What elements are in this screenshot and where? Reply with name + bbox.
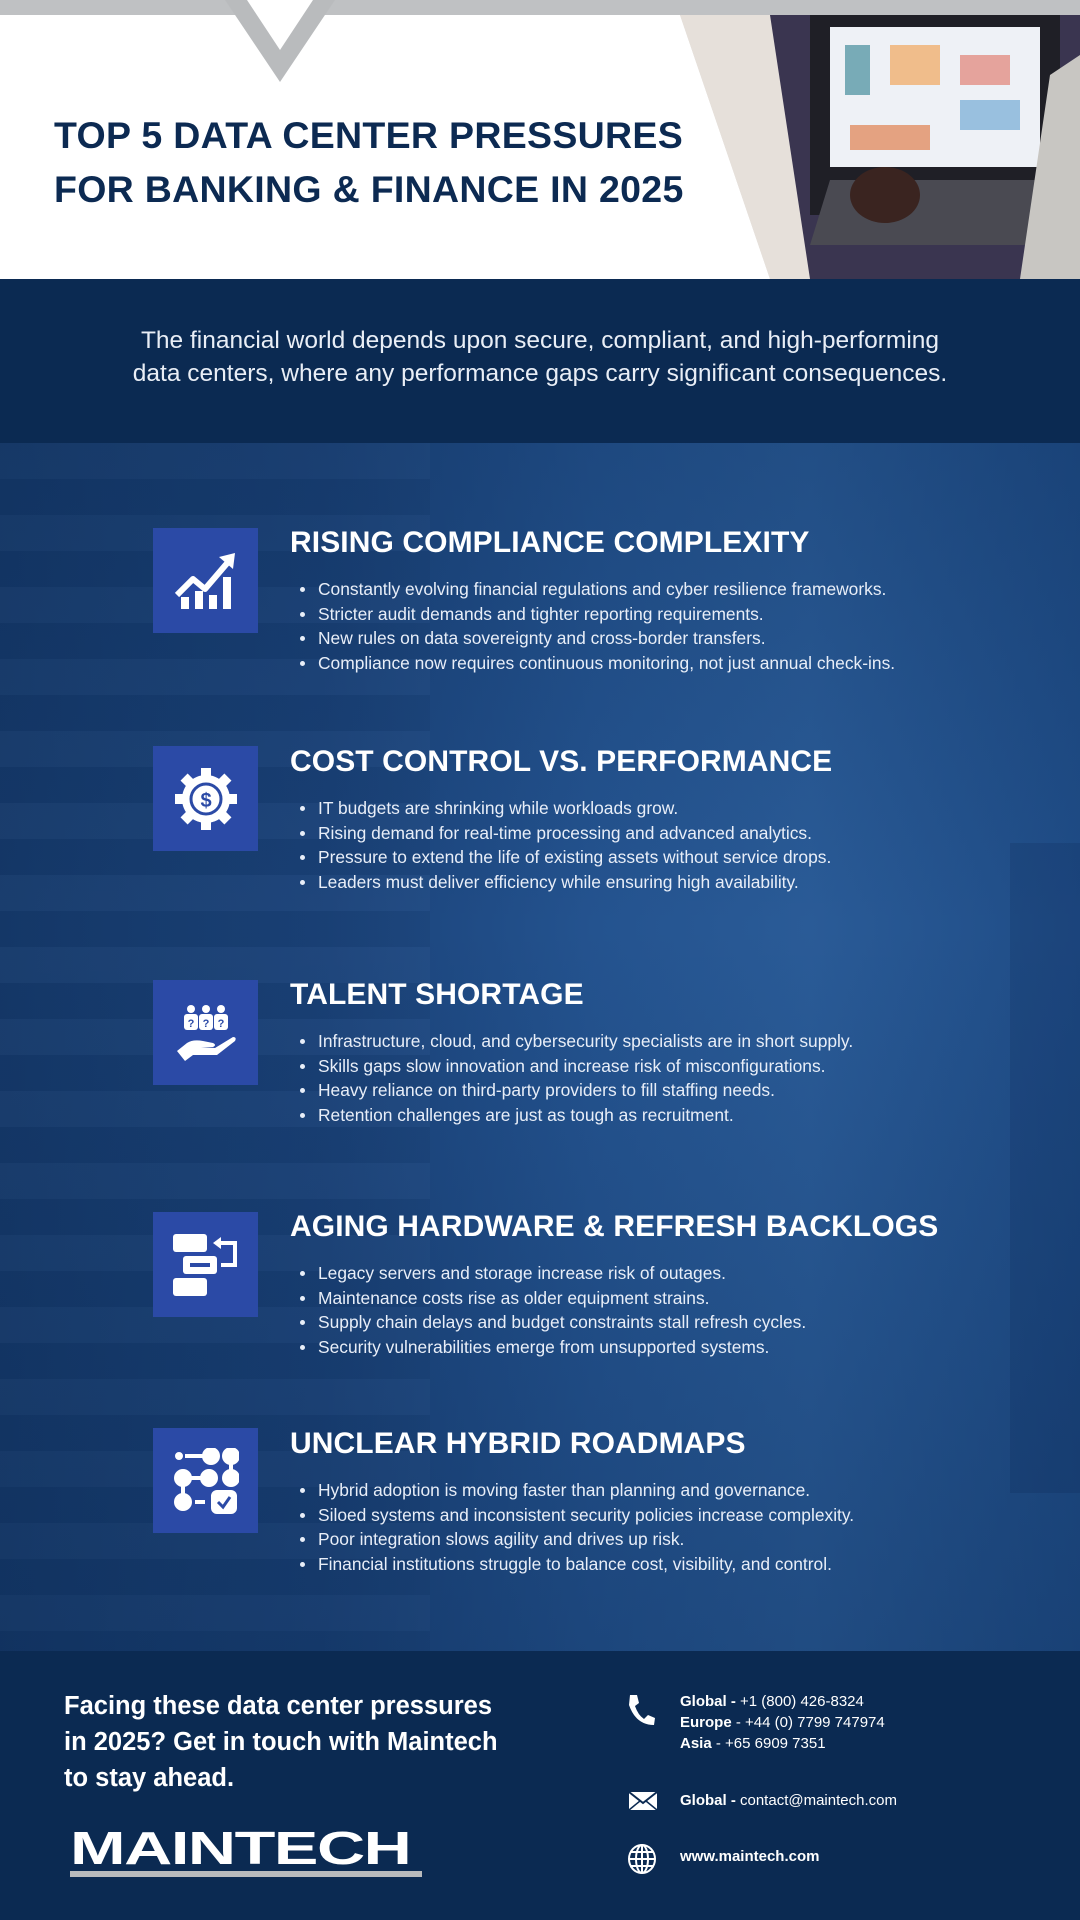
heading 3: TALENT SHORTAGE [290,978,584,1011]
bullets 2: Pressure to extend the life of existing assets without service drops. [318,847,831,867]
bullets 3: Heavy reliance on third-party providers to fill staffing needs. [318,1080,775,1100]
phone numbers: Global - +1 (800) 426-8324 [680,1693,864,1710]
bullets 2: Leaders must deliver efficiency while ensuring high availability. [318,872,799,892]
bullets 5: Financial institutions struggle to balance cost, visibility, and control. [318,1554,832,1574]
section 2 icon: gear dollar: $ [200,790,211,812]
title [54,114,684,210]
phone numbers: Asia - +65 6909 7351 [680,1735,826,1752]
icon: globe [628,1844,656,1874]
bullets 3: Infrastructure, cloud, and cybersecurity specialists are in short supply. [318,1031,853,1051]
section 3 icon: talent hand: ? [217,1018,224,1030]
heading 4: AGING HARDWARE & REFRESH BACKLOGS [290,1210,938,1243]
section 4 icon: refresh blocks [153,1212,258,1317]
intro text: The financial world depends upon secure, compliant, and high-performing [141,327,939,354]
section 3 icon: talent hand [153,980,258,1085]
main panel: pressures [0,443,1080,1651]
heading 2: COST CONTROL VS. PERFORMANCE [290,745,832,778]
intro text [133,327,947,387]
bullets 1: New rules on data sovereignty and cross-border transfers. [318,628,766,648]
section 3 icon: talent hand: ? [187,1018,194,1030]
bullets 1: Constantly evolving financial regulations and cyber resilience frameworks. [318,579,886,599]
phone numbers [680,1693,885,1752]
bullets 4: Security vulnerabilities emerge from unsupported systems. [318,1336,769,1356]
bullets 4: Maintenance costs rise as older equipment strains. [318,1288,710,1308]
section 3 icon: talent hand: ? [202,1018,209,1030]
icon: phone [629,1695,655,1725]
logo: MAINTECH [70,1822,410,1874]
bullets 3: Retention challenges are just as tough as recruitment. [318,1104,734,1124]
bullets 2 [300,798,831,892]
heading 1: RISING COMPLIANCE COMPLEXITY [290,526,810,559]
heading 5: UNCLEAR HYBRID ROADMAPS [290,1427,746,1460]
CTA text [64,1692,498,1792]
bullets 1 [300,579,895,672]
CTA text: Facing these data center pressures [64,1692,492,1720]
chevron decoration [235,0,325,82]
bullets 4: Legacy servers and storage increase risk of outages. [318,1263,726,1283]
bullets 4 [300,1263,806,1356]
bullets 3 [300,1031,853,1124]
email: Global - contact@maintech.com [680,1792,897,1809]
footer panel [0,1651,1080,1920]
bullets 5: Poor integration slows agility and drives up risk. [318,1529,684,1549]
section 2 icon: gear dollar [153,746,258,851]
section 5 icon: roadmap [153,1428,258,1533]
website: www.maintech.com [680,1848,819,1865]
bullets 4: Supply chain delays and budget constraints stall refresh cycles. [318,1312,806,1332]
bullets 5 [300,1480,854,1574]
bullets 3: Skills gaps slow innovation and increase risk of misconfigurations. [318,1056,825,1076]
top gray bar [0,0,1080,15]
section 1 icon: rising chart [153,528,258,633]
bullets 2: Rising demand for real-time processing and advanced analytics. [318,822,812,842]
phone numbers: Europe - +44 (0) 7799 747974 [680,1714,885,1731]
bullets 1: Compliance now requires continuous monitoring, not just annual check-ins. [318,652,895,672]
CTA text: in 2025? Get in touch with Maintech [64,1728,498,1756]
bullets 5: Siloed systems and inconsistent security policies increase complexity. [318,1504,854,1524]
header panel [0,0,1080,279]
title: TOP 5 DATA CENTER PRESSURES [54,114,683,156]
intro text: data centers, where any performance gaps carry significant consequences. [133,360,947,387]
bullets 5: Hybrid adoption is moving faster than planning and governance. [318,1480,810,1500]
header photo: laptop [680,15,1080,279]
intro band [0,279,1080,443]
bullets 2: IT budgets are shrinking while workloads grow. [318,798,678,818]
CTA text: to stay ahead. [64,1764,234,1792]
bullets 1: Stricter audit demands and tighter reporting requirements. [318,604,764,624]
icon: email [629,1792,657,1810]
title: FOR BANKING & FINANCE IN 2025 [54,168,684,210]
